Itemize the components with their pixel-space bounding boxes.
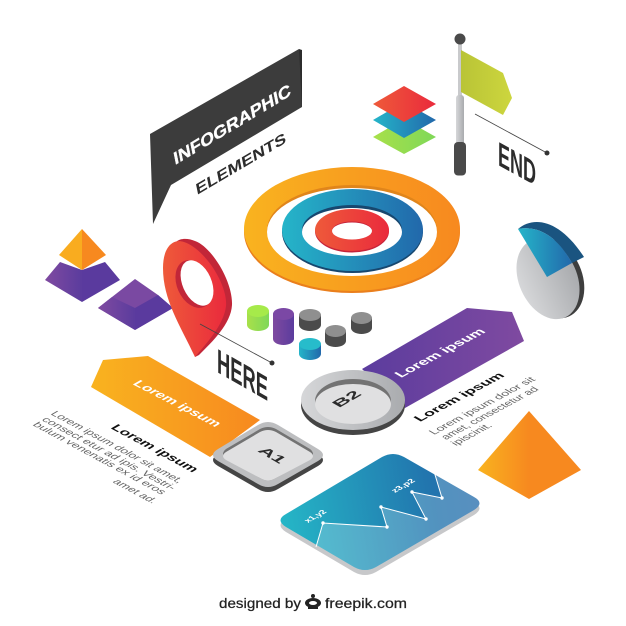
- right heading: Lorem ipsum: [410, 370, 508, 424]
- end label: [475, 114, 550, 193]
- target rings: [244, 167, 460, 293]
- cyan cylinder: [299, 338, 321, 360]
- here label: HERE: [217, 341, 268, 408]
- outer orange ring: [244, 167, 460, 293]
- blue ring: [282, 189, 423, 273]
- cylinders: [247, 305, 372, 360]
- green cylinder: [247, 305, 269, 331]
- a1 badge: [213, 422, 323, 492]
- title: elements: ELEMENTS: [194, 130, 287, 199]
- red ring: [315, 209, 389, 252]
- title: infographic: INFOGRAPHIC: [172, 80, 292, 169]
- gray cylinder 3: [351, 312, 372, 334]
- right paragraph: [427, 376, 542, 448]
- left paragraph: bulum venenatis ex id eros: [29, 421, 168, 496]
- label z3,p2: z3,p2: [389, 477, 418, 494]
- purple arrow banner: [362, 308, 524, 408]
- footer credit: designed by: [219, 595, 301, 611]
- left paragraph: consect etur ad ipis. Vestri-: [38, 416, 179, 492]
- orange arrow banner: Lorem ipsum: [129, 378, 226, 429]
- end label: END: [498, 134, 536, 193]
- right text block: [410, 370, 542, 448]
- icon: stacked pyramid: [45, 229, 120, 302]
- line chart: [316, 474, 480, 570]
- a1 badge: A1: [254, 444, 291, 466]
- here label: [200, 324, 274, 408]
- right paragraph: ipiscinit.: [449, 422, 496, 448]
- icon: pie chart: [504, 222, 596, 329]
- right paragraph: amet, consectetur ad: [439, 386, 542, 442]
- label x1,y2: x1,y2: [302, 508, 329, 524]
- orange arrow banner: [91, 356, 260, 457]
- icon: layers: [373, 86, 436, 154]
- footer credit: freepik.com: [325, 595, 407, 611]
- icon: location pin: [163, 239, 232, 357]
- left paragraph: amet ad.: [109, 478, 159, 505]
- left paragraph: [29, 410, 185, 505]
- icon: truncated pyramid: [98, 279, 173, 330]
- gray cylinder 1: [299, 309, 321, 331]
- title banner: [150, 49, 302, 224]
- b2 badge: B2: [328, 388, 365, 410]
- footer credit: [219, 594, 407, 611]
- purple arrow banner: Lorem ipsum: [391, 326, 489, 380]
- gray cylinder 2: [325, 325, 346, 347]
- right paragraph: Lorem ipsum dolor sit: [427, 376, 539, 437]
- left paragraph: Lorem ipsum dolor sit amet,: [47, 410, 185, 485]
- icon: freepik logo: [305, 594, 321, 609]
- icon: end flag: [454, 34, 512, 176]
- left heading: Lorem ipsum: [107, 422, 202, 474]
- b2 badge: [301, 370, 405, 435]
- left text block: [29, 410, 202, 505]
- purple cylinder: [273, 308, 294, 345]
- chart card: [280, 454, 490, 580]
- icon: orange pyramid: [478, 411, 581, 499]
